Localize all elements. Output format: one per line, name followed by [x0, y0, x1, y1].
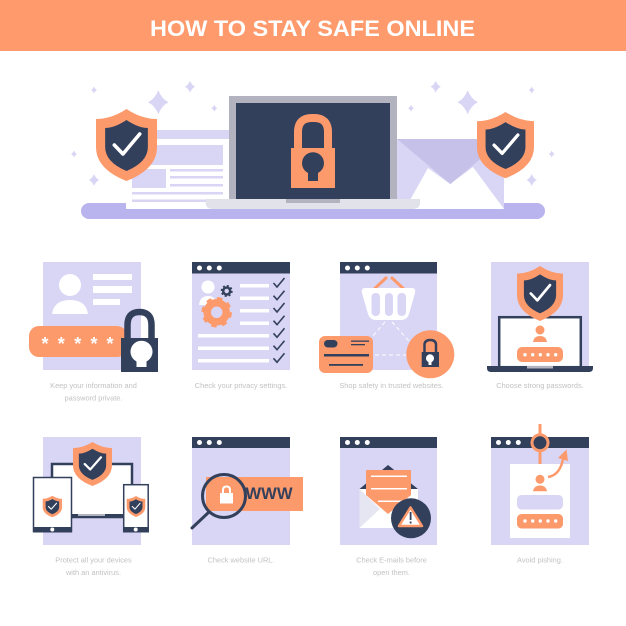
shopping basket [362, 278, 415, 320]
laptop with padlock [206, 96, 420, 209]
panel: privacy settings [192, 262, 290, 390]
caption: Check E-mails before [356, 556, 427, 564]
tablet [33, 478, 72, 532]
phone [123, 485, 149, 532]
dashed connections [372, 322, 409, 355]
laptop [52, 464, 133, 518]
person icon [52, 274, 88, 314]
padlock [291, 118, 335, 188]
browser bar [340, 262, 437, 274]
warning badge [391, 498, 431, 538]
username field [517, 495, 563, 510]
envelope [397, 139, 504, 209]
caption: password private. [65, 394, 122, 402]
ground bar [81, 203, 545, 219]
URL bar: WWW [246, 485, 293, 503]
panel: avoid phishing [491, 424, 589, 564]
password pill [517, 347, 563, 362]
browser bar [340, 437, 437, 448]
panel: strong passwords [487, 262, 593, 390]
password field: * [106, 334, 114, 354]
caption: Check website URL. [208, 556, 274, 564]
credit card [319, 336, 373, 373]
magnifying glass [192, 474, 246, 528]
caption: Shop safety in trusted websites. [339, 381, 444, 390]
arrow [548, 450, 568, 477]
person icon [533, 326, 547, 342]
right shield [477, 112, 534, 178]
panel: protect devices [33, 437, 149, 577]
lock icon [220, 486, 233, 504]
setting lines [198, 284, 269, 362]
header banner [0, 0, 626, 51]
login card [510, 464, 570, 538]
open envelope [360, 465, 418, 528]
person icon [533, 475, 547, 491]
caption: Choose strong passwords. [496, 381, 584, 390]
panel: check emails [340, 437, 437, 577]
large gear [203, 299, 230, 326]
password field [29, 326, 127, 357]
panel: shop safely [319, 262, 454, 390]
web page document [126, 130, 231, 209]
phishing hook [532, 424, 548, 464]
padlock icon [121, 312, 158, 372]
browser bar [491, 437, 589, 448]
text lines [93, 274, 132, 305]
password field: * [90, 334, 98, 354]
small gear [222, 286, 232, 296]
caption: Protect all your devices [55, 556, 132, 564]
password field: * [41, 334, 49, 354]
letter [366, 470, 411, 514]
panel: keep information private [29, 262, 158, 402]
password field [517, 514, 563, 528]
caption [55, 556, 132, 577]
panel: check URL [192, 437, 303, 564]
hero illustration [71, 81, 555, 219]
caption: open them. [373, 568, 410, 577]
person icon [199, 280, 217, 305]
caption [356, 556, 427, 577]
laptop shield [73, 442, 112, 486]
title: HOW TO STAY SAFE ONLINE [150, 16, 475, 41]
password field: * [74, 334, 81, 354]
password field: * [58, 334, 65, 354]
browser bar [192, 437, 290, 448]
laptop [487, 317, 593, 372]
caption: with an antivirus. [65, 568, 121, 577]
left shield [96, 109, 157, 181]
sparkles [71, 81, 555, 186]
caption: Keep your information and [50, 381, 137, 390]
caption: Check your privacy settings. [195, 381, 287, 390]
caption: Avoid pishing. [517, 556, 563, 564]
shield [517, 266, 563, 321]
lock badge [406, 330, 454, 378]
caption [50, 381, 137, 402]
browser bar [192, 262, 290, 274]
check marks [274, 278, 284, 362]
